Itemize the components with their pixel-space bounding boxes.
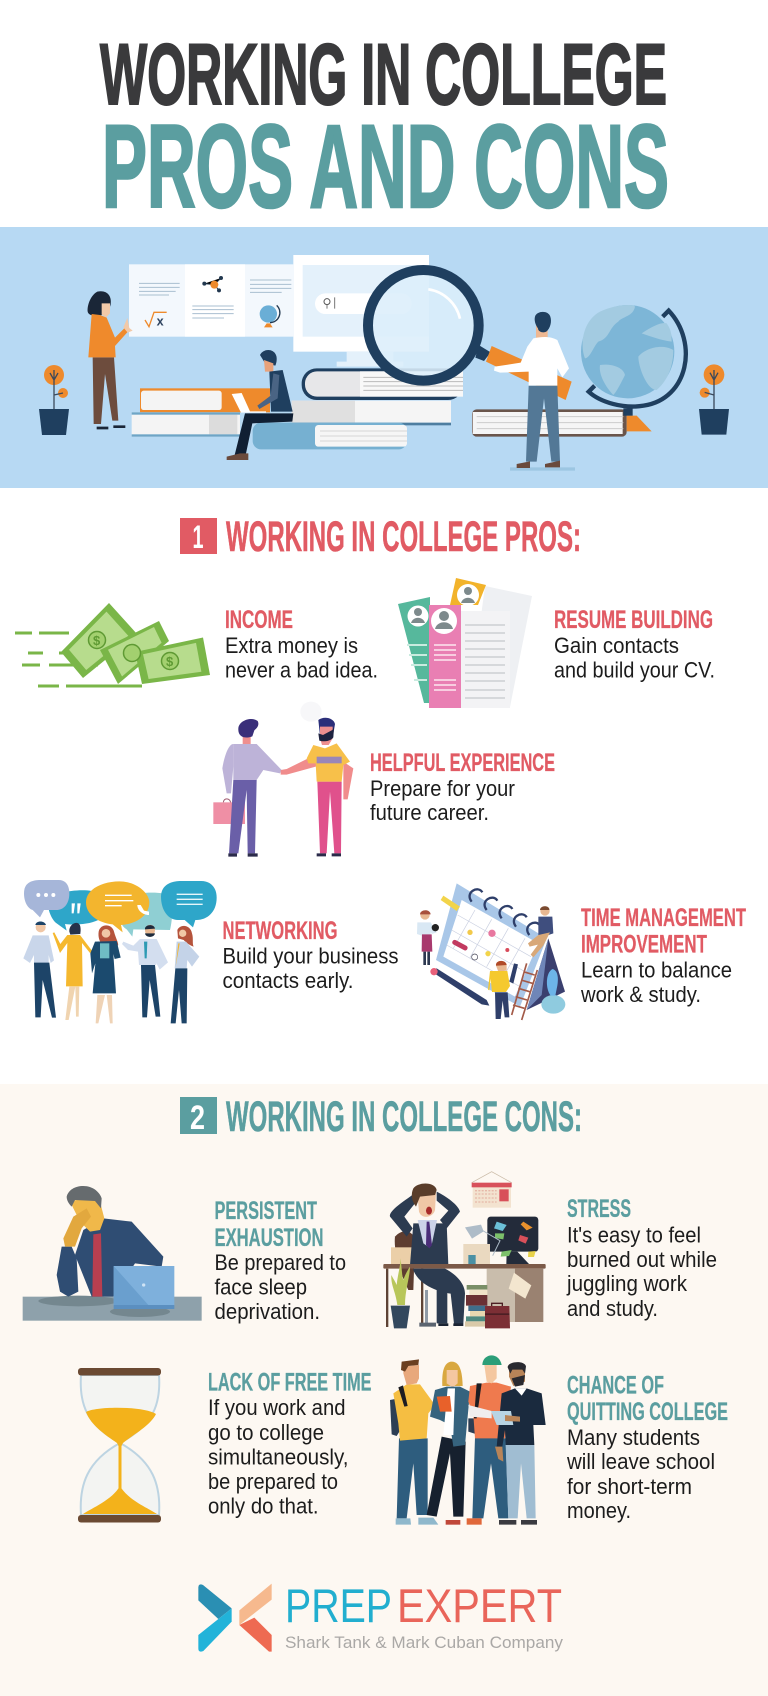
text: chance of quitting college: will leave school bbox=[566, 1449, 715, 1474]
text: stress bbox=[566, 1195, 717, 1321]
logo: Prep Expert: PREP bbox=[285, 1579, 392, 1632]
illustration: magnifier, standing man and globe bbox=[368, 270, 729, 471]
heading: section 2 cons bbox=[180, 1093, 582, 1141]
text: stress: juggling work bbox=[566, 1271, 688, 1296]
heading: section 1 pros: 1 bbox=[192, 519, 204, 555]
figure: bearded man with tie bbox=[122, 925, 168, 1017]
text: persistent exhaustion: deprivation. bbox=[214, 1299, 320, 1324]
text: helpful experience: HELPFUL EXPERIENCE bbox=[370, 749, 555, 777]
illustration: calendar with small people bbox=[417, 883, 565, 1020]
text: networking: Build your business bbox=[222, 944, 398, 968]
figure: man with big pencil bbox=[488, 961, 518, 1019]
panel: banner illustration bbox=[0, 227, 768, 488]
icon: handshake bbox=[213, 702, 353, 857]
figure: man in blue shirt bbox=[23, 921, 56, 1018]
figure: woman in yellow dress bbox=[53, 923, 93, 1020]
text: income: INCOME bbox=[225, 606, 293, 634]
figure: bearded student in navy sweater bbox=[491, 1362, 546, 1525]
text: resume building: Gain contacts bbox=[554, 633, 679, 658]
illustration: research panels, monitor, woman, books and seated man: x bbox=[157, 315, 164, 329]
text: stress: It's easy to feel bbox=[567, 1222, 701, 1248]
text: income: Extra money is bbox=[225, 633, 358, 658]
figure: blonde student bbox=[427, 1362, 470, 1525]
icon: resume pages bbox=[398, 578, 532, 708]
logo: Prep Expert: Shark Tank & Mark Cuban Company bbox=[285, 1633, 563, 1652]
text: helpful experience: future career. bbox=[370, 800, 489, 825]
text: time management improvement: Learn to balance bbox=[581, 958, 732, 982]
text: lack of free time: go to college bbox=[208, 1420, 324, 1445]
icon: flying money: $ bbox=[93, 633, 101, 648]
text: helpful experience: Prepare for your bbox=[370, 776, 515, 801]
text: lack of free time: only do that. bbox=[208, 1494, 318, 1518]
figure: student with yellow shirt bbox=[390, 1359, 438, 1525]
text: networking bbox=[222, 917, 398, 993]
icon: flying money: $ bbox=[166, 654, 174, 669]
figure: student with green cap bbox=[467, 1355, 511, 1525]
logo: Prep Expert: EXPERT bbox=[397, 1579, 562, 1632]
illustration: four students bbox=[390, 1355, 546, 1525]
illustration: stressed man at desk bbox=[383, 1172, 546, 1328]
text: stress: STRESS bbox=[567, 1195, 631, 1223]
figure: standing man bbox=[494, 312, 575, 471]
text: persistent exhaustion: EXHAUSTION bbox=[214, 1224, 324, 1252]
figure: woman presenting bbox=[88, 291, 133, 429]
text: chance of quitting college: money. bbox=[567, 1498, 631, 1523]
text: chance of quitting college bbox=[566, 1372, 728, 1523]
text: persistent exhaustion: Be prepared to bbox=[214, 1250, 346, 1275]
text: resume building bbox=[554, 606, 715, 682]
text: helpful experience bbox=[370, 749, 555, 825]
icon: exhausted man at laptop bbox=[23, 1186, 202, 1321]
title bbox=[100, 27, 669, 233]
icon: right plant bbox=[699, 364, 729, 435]
illustration: networking people and speech bubbles bbox=[23, 880, 217, 1023]
text: stress: and study. bbox=[567, 1296, 658, 1321]
text: time management improvement: work & study. bbox=[580, 982, 701, 1007]
heading: section 2 cons: 2 bbox=[190, 1099, 205, 1137]
heading: section 1 pros bbox=[180, 513, 581, 561]
text: chance of quitting college: CHANCE OF bbox=[567, 1372, 664, 1400]
illustration: research panels, monitor, woman, books and seated man bbox=[88, 255, 463, 460]
text: chance of quitting college: for short-term bbox=[567, 1474, 692, 1499]
figure: seated man with laptop bbox=[227, 350, 293, 460]
text: chance of quitting college: Many students bbox=[567, 1425, 700, 1450]
icon: hourglass bbox=[78, 1368, 161, 1522]
panel: cons background bbox=[0, 1084, 768, 1696]
text: persistent exhaustion: PERSISTENT bbox=[214, 1197, 317, 1225]
text: resume building: and build your CV. bbox=[554, 658, 715, 682]
logo: Prep Expert bbox=[198, 1579, 563, 1652]
text: persistent exhaustion: face sleep bbox=[214, 1274, 307, 1300]
text: lack of free time: If you work and bbox=[208, 1395, 346, 1420]
text: time management improvement bbox=[580, 904, 746, 1007]
text: lack of free time: be prepared to bbox=[208, 1469, 338, 1494]
text: networking: NETWORKING bbox=[222, 917, 338, 945]
text: income: never a bad idea. bbox=[225, 658, 378, 682]
figure: man on calendar top bbox=[528, 906, 553, 957]
icon: flying money bbox=[15, 603, 210, 686]
icon: logo chevrons bbox=[198, 1584, 272, 1652]
figure: woman by calendar bbox=[417, 910, 439, 965]
text: networking: contacts early. bbox=[222, 968, 354, 993]
text: lack of free time: simultaneously, bbox=[208, 1444, 348, 1470]
figure: woman in navy skirt bbox=[90, 925, 121, 1023]
text: persistent exhaustion bbox=[214, 1197, 346, 1324]
figure: woman with red hair bbox=[171, 926, 199, 1023]
text: income bbox=[225, 606, 378, 682]
icon: magnifying glass bbox=[368, 270, 572, 400]
text: lack of free time bbox=[208, 1368, 372, 1518]
text: stress: burned out while bbox=[567, 1247, 717, 1272]
text: lack of free time: LACK OF FREE TIME bbox=[208, 1368, 372, 1396]
icon: left plant bbox=[39, 365, 69, 435]
text: time management improvement: IMPROVEMENT bbox=[581, 930, 707, 958]
